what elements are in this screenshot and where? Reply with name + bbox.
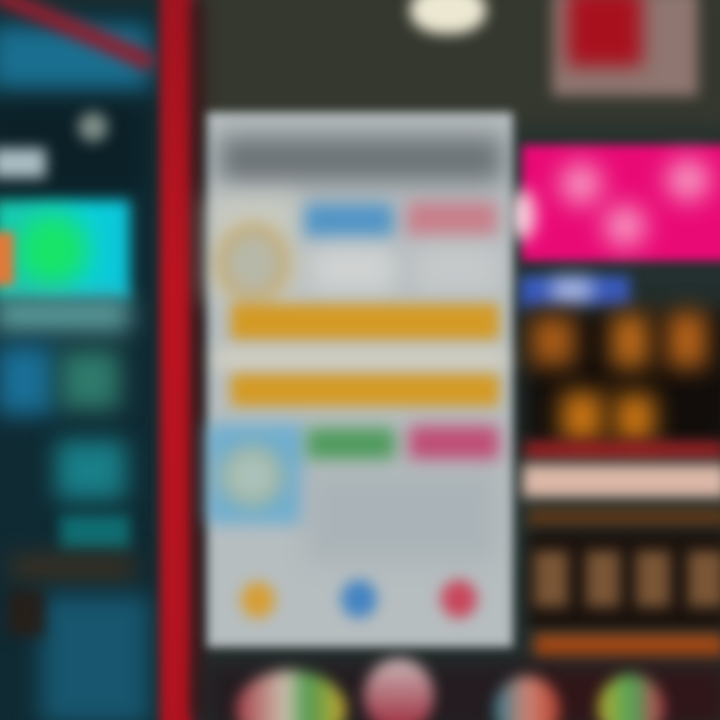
panel: left dark shelf	[0, 105, 145, 190]
icon: white spot	[78, 112, 108, 142]
icon: dark object	[8, 590, 44, 636]
bottle 1	[531, 316, 575, 366]
panel: framed red sign	[552, 0, 698, 96]
blue tile with circle	[207, 424, 303, 524]
red diagonal beam	[0, 0, 156, 72]
bottle 2	[611, 314, 649, 368]
panel: blue label strip	[520, 276, 630, 310]
left blue wall	[0, 25, 150, 90]
ball 1	[236, 670, 346, 720]
panel: dark shelves	[525, 310, 720, 450]
icon: blue dot	[341, 580, 377, 618]
panel: left display	[0, 0, 165, 720]
panel: lower bottles	[525, 542, 720, 616]
panel: pale band	[522, 464, 720, 498]
yellow bar two	[231, 374, 499, 406]
spot 1	[560, 163, 602, 205]
ball 4	[598, 674, 664, 720]
lower bottle 3	[636, 551, 670, 607]
panel: upper bottles	[516, 294, 720, 451]
pale band one	[215, 348, 507, 370]
panel: blue tile	[0, 345, 54, 415]
second column text	[415, 246, 499, 292]
panel: bottom dark strip	[206, 662, 526, 720]
bottom ball group	[226, 649, 674, 720]
panel: cyan screen	[0, 200, 130, 300]
panel: teal tile	[56, 440, 126, 500]
bottle 3	[667, 312, 707, 368]
panel: screen lower strip	[0, 298, 130, 332]
bottle 4	[561, 392, 603, 442]
lower bottle 2	[586, 551, 620, 607]
blue header chip	[305, 204, 393, 238]
lower bottle 4	[688, 551, 720, 607]
spot 2	[666, 159, 710, 201]
icon: yellow circle	[223, 448, 281, 504]
ball 2	[364, 658, 434, 720]
ball 3	[494, 676, 560, 720]
bottle 5	[615, 394, 655, 442]
panel: orange strip	[534, 634, 720, 658]
panel: red strip	[525, 442, 720, 458]
icon: multicolour patch	[0, 232, 14, 286]
panel: bottom blue floor	[40, 595, 150, 720]
panel: magenta display	[522, 145, 720, 261]
first column text	[311, 246, 395, 292]
red vertical pillar	[160, 0, 194, 720]
poster: main infographic panel	[207, 112, 513, 648]
red sign centre	[568, 0, 642, 66]
panel: brown shelf	[10, 555, 135, 580]
icon: white label	[0, 148, 46, 178]
icon: green patch	[18, 215, 88, 285]
spot 3	[604, 205, 646, 247]
panel: lower teal tile	[60, 515, 130, 550]
icon: orange dot	[241, 582, 275, 618]
yellow bar one	[231, 304, 499, 340]
spot 4	[508, 189, 536, 241]
pink header chip	[409, 426, 499, 460]
ceiling lamp	[410, 0, 486, 34]
background: upper wall	[190, 0, 720, 130]
green header chip	[307, 428, 395, 460]
pillar shadow	[192, 0, 204, 720]
icon: yellow ring	[217, 224, 289, 302]
top left circle tile	[209, 196, 299, 300]
red header chip	[407, 202, 497, 236]
lower bottle 1	[534, 551, 568, 607]
lower column text	[307, 472, 497, 562]
panel: bottom dark right	[520, 664, 720, 720]
heading bars	[219, 136, 503, 182]
panel: brown shelf right	[528, 508, 720, 528]
panel: green tile	[60, 350, 120, 410]
panel: lower dark shelves	[528, 530, 720, 630]
white glow on strip	[552, 278, 592, 306]
icon: red dot	[441, 580, 477, 618]
